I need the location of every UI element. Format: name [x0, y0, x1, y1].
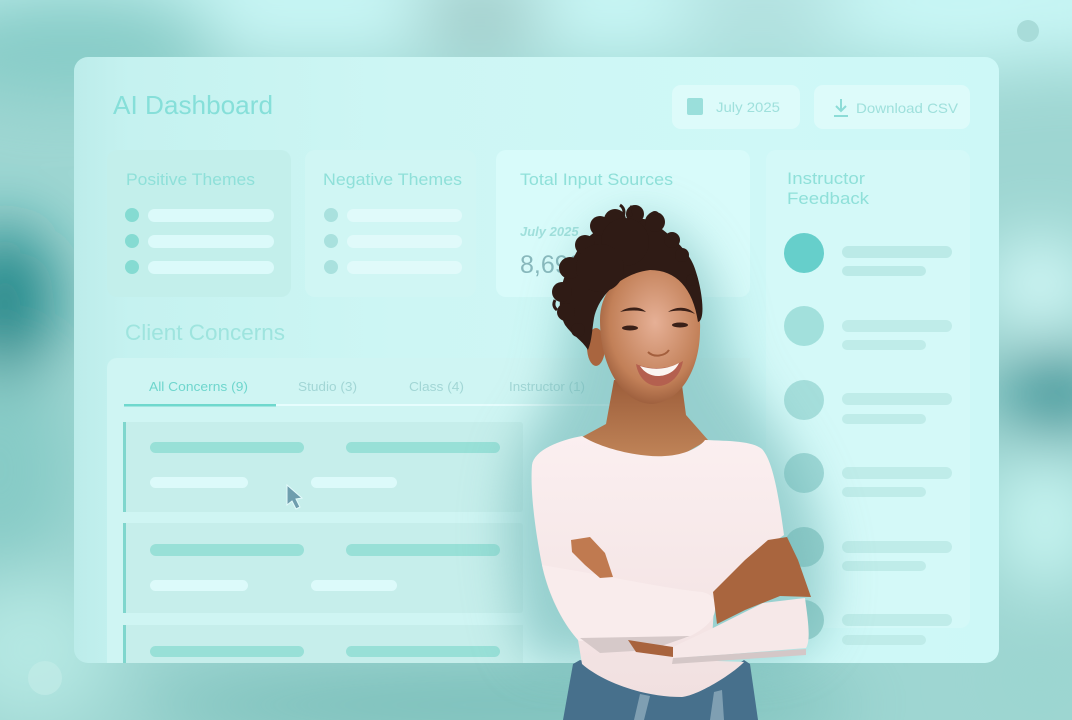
concern row 2 — [123, 523, 523, 613]
icon: mouse cursor — [287, 485, 302, 509]
hair — [552, 205, 702, 350]
panel: instructor feedback: Instructor — [787, 170, 866, 188]
panel: negative themes: Negative Themes — [323, 171, 462, 189]
tabs: Studio (3) — [298, 379, 357, 394]
panel: total input sources: Total Input Sources — [520, 171, 673, 189]
title: AI Dashboard — [113, 90, 273, 120]
person: smiling woman with crossed arms — [532, 205, 811, 720]
panel: positive themes: Positive Themes — [126, 171, 255, 189]
right forearm sleeve — [672, 598, 809, 658]
tabs: All Concerns (9) — [149, 379, 248, 394]
feedback row 3 — [784, 380, 952, 424]
download CSV button — [814, 85, 970, 129]
tabs: Class (4) — [409, 379, 464, 394]
smile — [636, 361, 683, 386]
tabs: Instructor (1) — [509, 379, 585, 394]
right hand — [713, 537, 811, 624]
shirt — [532, 436, 809, 697]
soft shadow behind person — [507, 220, 826, 660]
download CSV button: Download CSV — [856, 100, 959, 116]
tabs — [124, 379, 614, 406]
panel: dashboard glass card — [74, 57, 999, 663]
panel: instructor feedback: Feedback — [787, 190, 870, 208]
panel: negative themes — [305, 150, 476, 297]
decorative circle bottom left — [28, 661, 62, 695]
lower forearm skin — [628, 640, 673, 657]
panel: total input sources: July 2025 — [520, 224, 579, 239]
feedback row 2 — [784, 306, 952, 350]
date button — [672, 85, 800, 129]
panel: positive themes — [107, 150, 291, 297]
feedback row 1 — [784, 233, 952, 276]
panel: total input sources: 8,690 — [520, 251, 583, 279]
jeans — [563, 660, 758, 720]
panel: instructor feedback — [766, 150, 970, 645]
panel: client concerns list — [107, 358, 750, 663]
concern row 1 — [123, 422, 523, 512]
heading: client concerns: Client Concerns — [125, 320, 285, 345]
feedback row 4 — [784, 453, 952, 497]
teeth — [640, 363, 679, 376]
feedback row 5 — [784, 527, 952, 571]
left forearm sleeve — [542, 565, 715, 641]
date button: July 2025 — [716, 99, 780, 115]
decorative circle top right — [1017, 20, 1039, 42]
panel: total input sources — [496, 150, 750, 297]
eyebrows and eyes — [620, 308, 695, 330]
feedback row 6 — [784, 600, 952, 645]
left hand — [571, 537, 613, 578]
neck and chest — [582, 380, 708, 458]
face — [587, 268, 700, 404]
concern row 3 — [123, 625, 523, 663]
nose — [648, 350, 669, 356]
